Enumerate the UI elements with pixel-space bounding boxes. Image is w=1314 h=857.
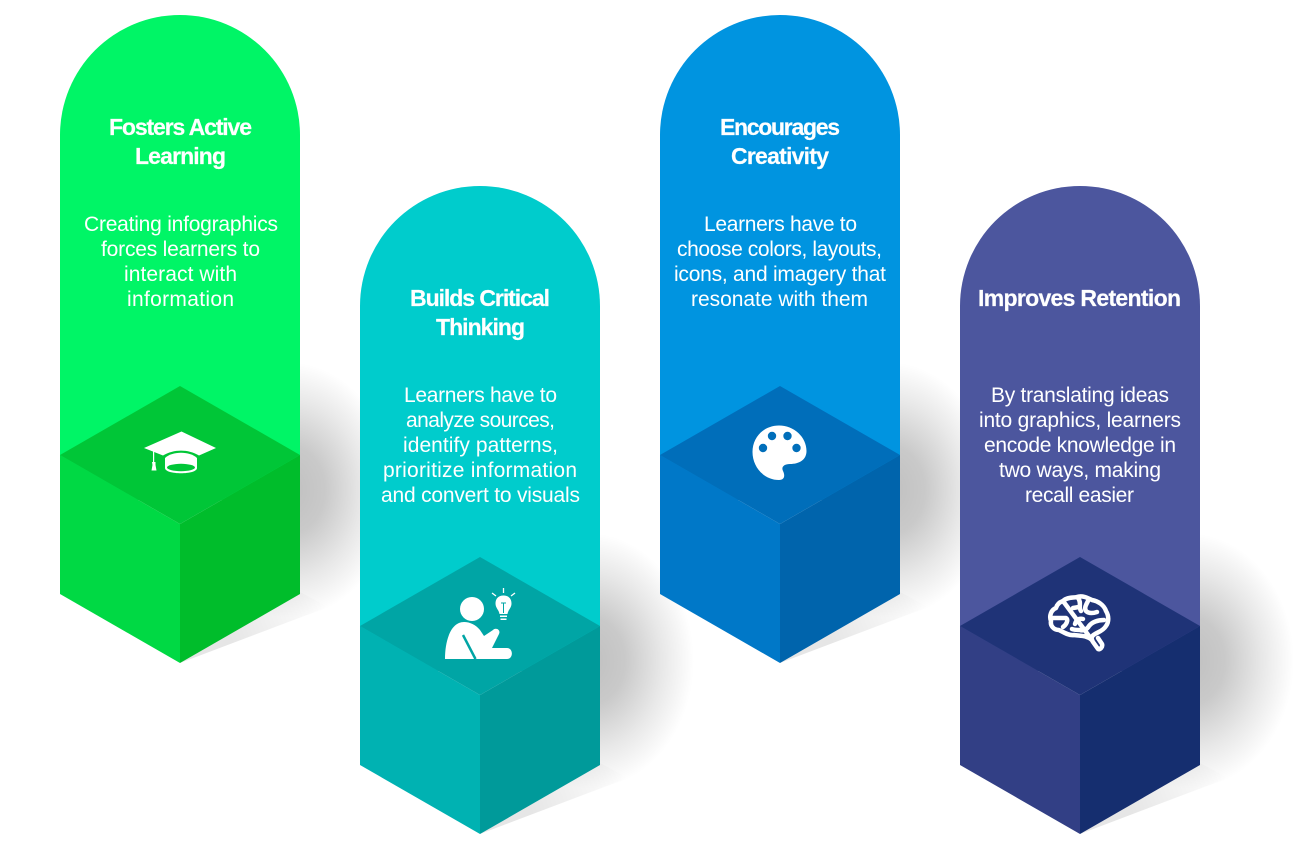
description [674, 213, 886, 311]
pillar: Fosters Active Learning [60, 15, 394, 663]
cube right face [1080, 626, 1200, 834]
cube right face [480, 626, 600, 834]
description: two ways, making [999, 459, 1161, 482]
description: into graphics, learners [979, 409, 1181, 432]
pillar: Builds Critical Thinking [360, 186, 694, 834]
heading: Creativity [731, 143, 829, 169]
icon: brain [1050, 596, 1108, 649]
pillar: Encourages Creativity [660, 15, 994, 663]
description: choose colors, layouts, [677, 238, 882, 261]
description: Learners have to [404, 384, 557, 407]
description [84, 213, 278, 311]
pillar: Improves Retention [960, 186, 1294, 834]
description: Learners have to [704, 213, 857, 236]
cube top face [660, 386, 900, 524]
heading: Fosters Active [109, 114, 252, 140]
shadow [180, 362, 394, 663]
shadow [1080, 533, 1294, 834]
shadow [780, 362, 994, 663]
icon: person with light bulb [445, 588, 515, 659]
description: Creating infographics [84, 213, 278, 236]
icon: paint palette [752, 426, 806, 480]
cube left face [60, 455, 180, 663]
description [979, 384, 1181, 507]
pillar body [360, 186, 600, 671]
heading: Learning [135, 143, 226, 169]
heading [109, 114, 252, 169]
description: information [127, 288, 234, 311]
description: identify patterns, [403, 434, 558, 457]
description: recall easier [1025, 484, 1134, 507]
description: forces learners to [101, 238, 260, 261]
description: prioritize information [383, 459, 577, 482]
heading [720, 114, 840, 169]
pillar body [960, 186, 1200, 671]
cube top face [960, 557, 1200, 695]
heading: Encourages [720, 114, 840, 140]
description: encode knowledge in [984, 434, 1176, 457]
description: analyze sources, [406, 409, 555, 432]
cube top face [360, 557, 600, 695]
pillar body [660, 15, 900, 500]
description: icons, and imagery that [674, 263, 886, 286]
icon: graduation cap [144, 432, 216, 473]
cube right face [780, 455, 900, 663]
description: By translating ideas [991, 384, 1169, 407]
description: interact with [124, 263, 237, 286]
description: and convert to visuals [381, 484, 580, 507]
heading [410, 285, 550, 340]
description [381, 384, 580, 507]
shadow [480, 533, 694, 834]
cube top face [60, 386, 300, 524]
heading: Improves Retention [978, 285, 1181, 311]
cube left face [660, 455, 780, 663]
heading: Thinking [436, 314, 525, 340]
cube left face [960, 626, 1080, 834]
heading: Builds Critical [410, 285, 550, 311]
description: resonate with them [691, 288, 868, 311]
pillar body [60, 15, 300, 500]
cube left face [360, 626, 480, 834]
cube right face [180, 455, 300, 663]
